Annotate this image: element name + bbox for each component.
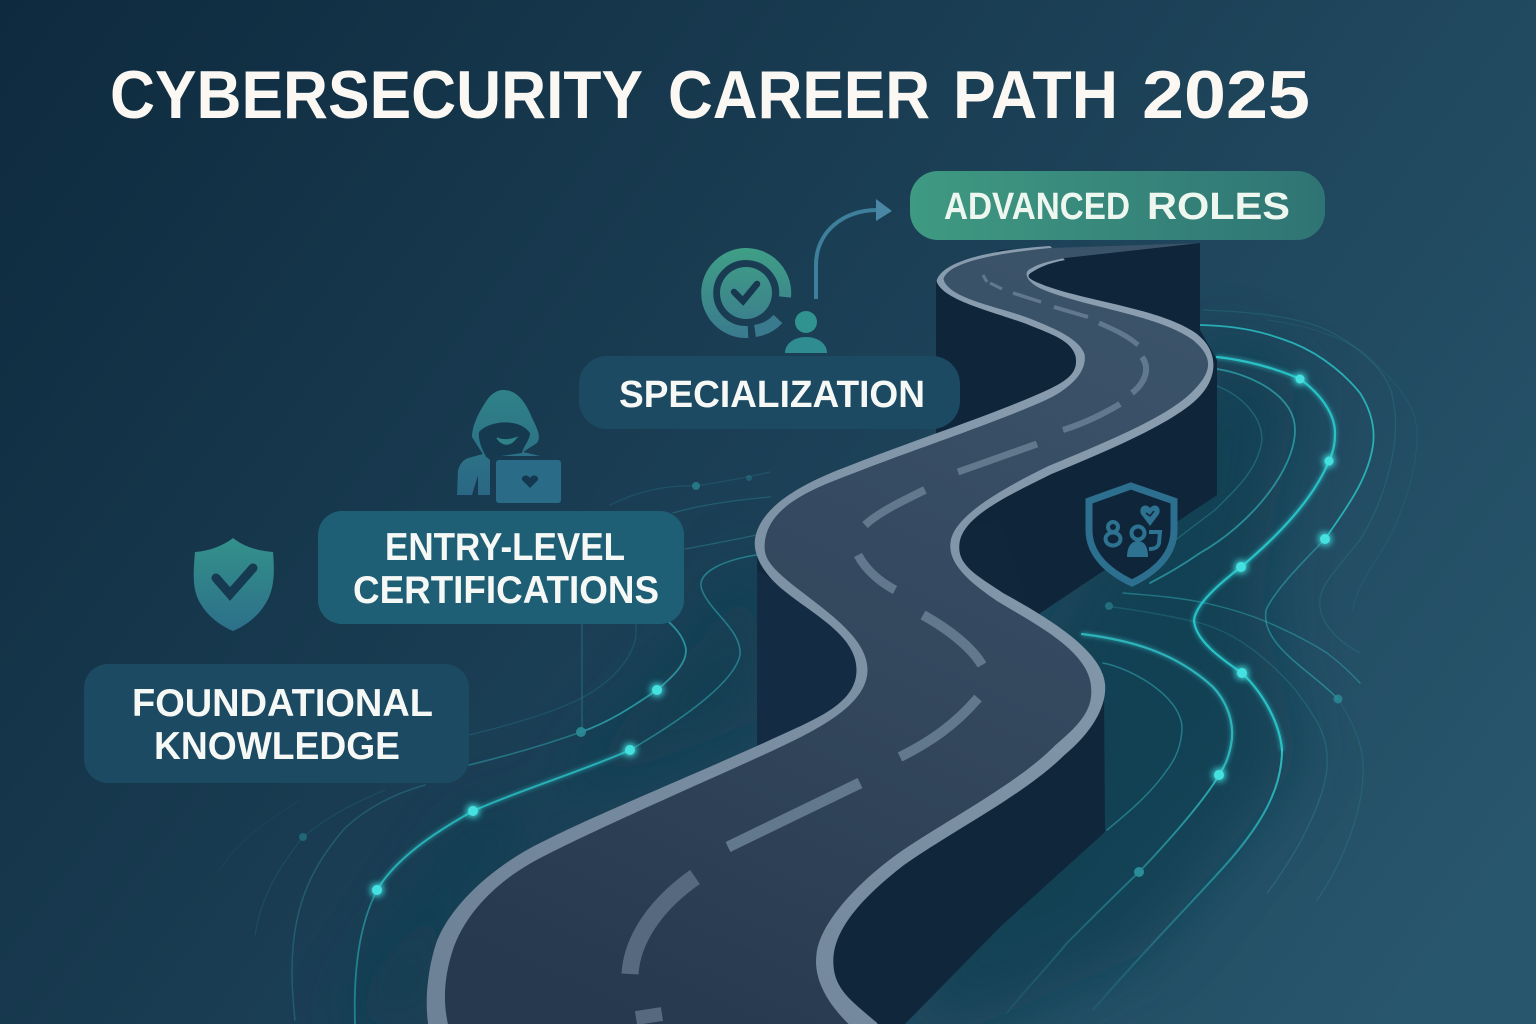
arrow to advanced roles: [816, 199, 892, 299]
left circuit lines: [220, 472, 770, 1024]
left wall shade: [757, 570, 870, 770]
icon: hooded hacker with laptop: [457, 390, 561, 503]
label: entry-level certifications: ENTRY-LEVEL: [385, 526, 625, 569]
upper road wall: [900, 243, 1217, 640]
label: foundational knowledge: KNOWLEDGE: [154, 725, 400, 768]
label: entry-level certifications: CERTIFICATIONS: [353, 569, 659, 612]
lower road wall: [757, 520, 1105, 1024]
icon: target badge and person: [707, 254, 827, 353]
label: advanced roles: ADVANCED: [944, 186, 1130, 228]
title: PATH: [953, 57, 1118, 133]
title: [110, 57, 1310, 133]
teal shadow bands around the road: [340, 340, 1300, 1024]
label: foundational knowledge: FOUNDATIONAL: [132, 682, 433, 725]
label: advanced roles: ROLES: [1147, 186, 1290, 228]
right circuit lines: [1007, 310, 1417, 1013]
label: advanced roles: [910, 171, 1325, 240]
title: CAREER: [668, 57, 930, 133]
dim circuit nodes: [299, 475, 1342, 877]
road surface: [445, 243, 1208, 1024]
circuit nodes: [372, 374, 1334, 895]
label: entry-level certifications: [318, 511, 684, 624]
road centre dashes: [630, 275, 1146, 1018]
road walls: [757, 243, 1217, 1024]
label: foundational knowledge: [84, 664, 469, 783]
road: [427, 243, 1213, 1024]
label: specialization: [579, 356, 960, 429]
icon: team shield: [1089, 486, 1174, 583]
title: 2025: [1142, 57, 1310, 133]
title: CYBERSECURITY: [110, 57, 643, 133]
icon: shield with check: [194, 538, 274, 631]
road edge band: [427, 246, 1213, 1024]
label: specialization: SPECIALIZATION: [619, 374, 925, 416]
